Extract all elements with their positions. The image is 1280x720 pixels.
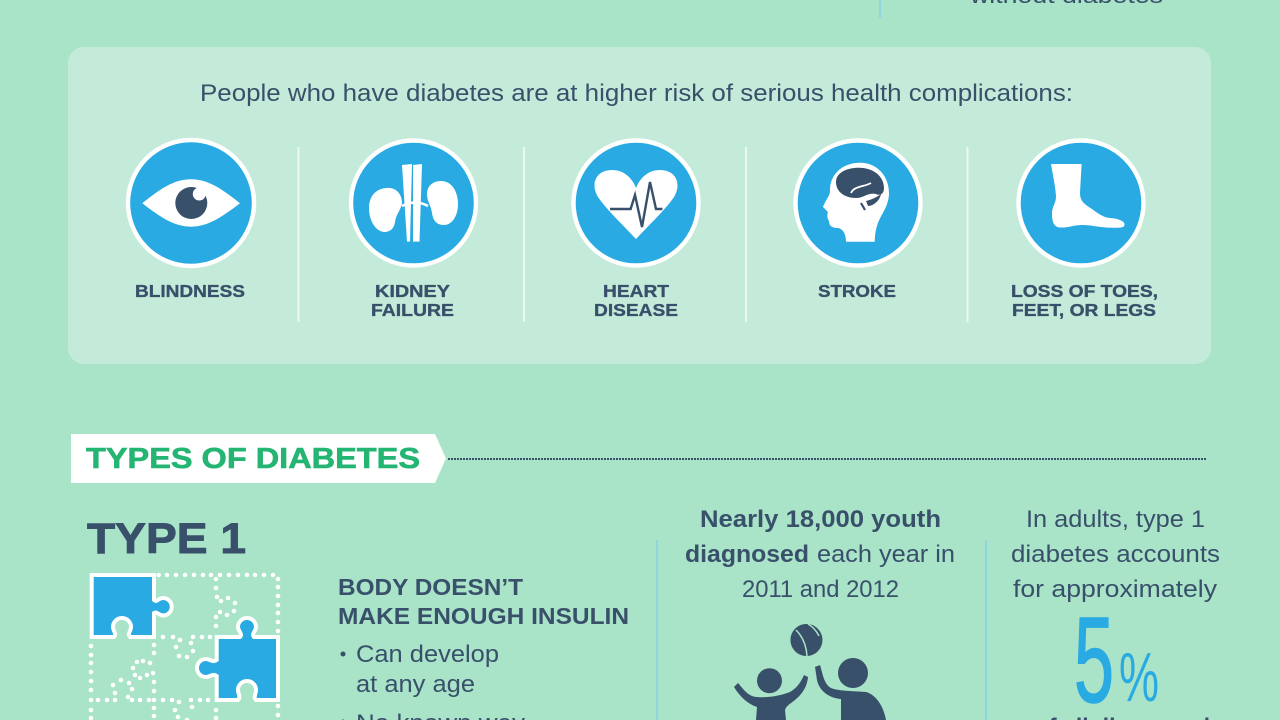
text block: insulin: at any age (356, 671, 475, 698)
section heading: types of diabetes (71, 434, 1207, 483)
puzzle graphic (91, 575, 278, 720)
label: kidney failure (371, 281, 454, 320)
icon: head with brain (796, 140, 920, 266)
icon: heart with pulse (574, 140, 698, 266)
text block: youth diagnoses: Nearly 18,000 youth (700, 506, 941, 533)
stat: five percent: % (1119, 638, 1159, 716)
label: kidney failure: KIDNEY (375, 281, 450, 301)
label: stroke: STROKE (818, 281, 896, 301)
icon: children playing ball (734, 624, 886, 720)
heading: type 1: TYPE 1 (87, 515, 246, 563)
label: kidney failure: FAILURE (371, 300, 454, 320)
label: heart disease: DISEASE (594, 300, 678, 320)
stat: five percent: for approximately (1013, 576, 1217, 603)
label: heart disease (594, 281, 678, 320)
text block: insulin: BODY DOESN’T (338, 574, 523, 600)
label: heart disease: HEART (603, 281, 669, 301)
text block: youth diagnoses: diagnosed (685, 541, 809, 568)
panel: health complications (68, 47, 1211, 364)
text block: insulin: Can develop (356, 641, 499, 668)
icon: kidneys (351, 140, 476, 266)
stat: five percent (1011, 506, 1220, 720)
label: blindness: BLINDNESS (135, 281, 245, 301)
label: loss of toes, feet, or legs (1011, 281, 1158, 320)
text block: insulin: MAKE ENOUGH INSULIN (338, 603, 629, 629)
icon: foot (1018, 140, 1144, 266)
label: loss of toes, feet, or legs: FEET, OR LEGS (1012, 300, 1156, 320)
section heading: types of diabetes: TYPES OF DIABETES (86, 443, 420, 475)
label: loss of toes, feet, or legs: LOSS OF TOES, (1011, 281, 1158, 301)
panel heading: People who have diabetes are at higher risk of serious health complications: (200, 80, 1073, 107)
stat: five percent: In adults, type 1 (1026, 506, 1205, 533)
text block: insulin (338, 574, 629, 720)
stat: five percent: diabetes accounts (1011, 541, 1220, 568)
text block: youth diagnoses: 2011 and 2012 (742, 576, 899, 603)
text block: youth diagnoses (685, 506, 955, 603)
icon: eye (128, 140, 254, 266)
text block: youth diagnoses: each year in (817, 541, 955, 568)
